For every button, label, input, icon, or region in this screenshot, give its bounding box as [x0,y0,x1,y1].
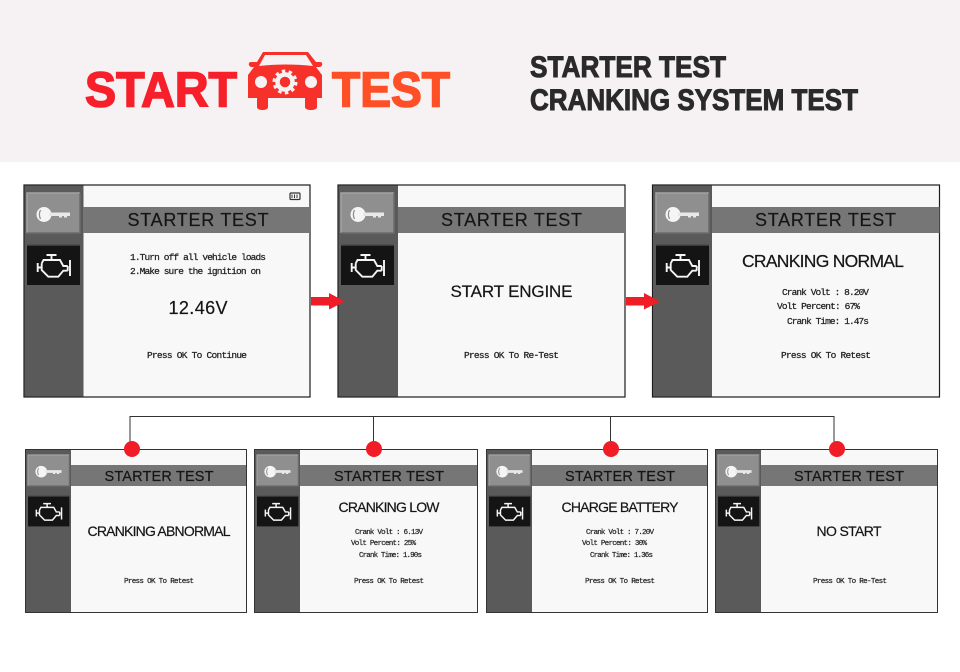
logo word START: START [85,64,237,118]
status: START ENGINE [450,282,572,301]
readings: Crank Volt : 8.20V [782,287,869,298]
panel: cranking low screen [254,450,478,612]
screen title: STARTER TEST [104,469,214,485]
panel: charge battery screen [486,450,708,612]
screen title: STARTER TEST [794,469,904,485]
heading: starter test: STARTER TEST [530,51,726,84]
panel: starter test voltage screen [24,185,310,397]
screen title: STARTER TEST [441,210,582,230]
prompt: Press OK To Continue [147,350,247,361]
screen title: STARTER TEST [128,210,268,230]
readings: Volt Percent: 67% [777,301,860,312]
status: NO START [816,523,882,539]
readings: Volt Percent: 30% [582,540,647,548]
readings: Crank Volt : 6.13V [355,529,423,537]
readings: Volt Percent: 25% [351,540,416,548]
header background [0,0,960,162]
instructions: 2.Make sure the ignition on [130,266,261,277]
screen title: STARTER TEST [565,469,675,485]
readings: Crank Time: 1.90s [359,552,422,560]
logo word TEST: TEST [332,64,450,118]
voltage reading: 12.46V [168,298,228,318]
panel: no start screen [716,450,938,612]
prompt: Press OK To Re-Test [813,578,887,586]
icon: battery [290,193,300,200]
prompt: Press OK To Retest [124,578,194,586]
prompt: Press OK To Retest [585,578,655,586]
readings: Crank Time: 1.47s [787,316,869,327]
status: CRANKING LOW [338,499,440,515]
arrow [311,293,345,310]
prompt: Press OK To Retest [781,350,871,361]
screen title: STARTER TEST [755,210,896,230]
connector dots [124,441,845,457]
prompt: Press OK To Re-Test [464,350,559,361]
panel: cranking abnormal screen [26,450,246,612]
readings [582,529,654,560]
connector lines [130,416,834,449]
arrow [626,293,660,310]
instructions: 1.Turn off all vehicle loads [130,252,266,263]
instructions [130,252,266,277]
readings: Crank Volt : 7.20V [586,529,654,537]
panel: start engine screen [338,185,625,397]
panel: cranking normal screen [652,185,940,397]
screen title: STARTER TEST [334,469,444,485]
logo: START car TEST [85,52,450,118]
readings [351,529,423,560]
heading: cranking system test: CRANKING SYSTEM TEST [530,84,858,117]
prompt: Press OK To Retest [354,578,424,586]
readings: Crank Time: 1.36s [590,552,653,560]
icon: car with gear [248,52,322,110]
readings [777,287,869,327]
status: CRANKING ABNORMAL [88,523,231,539]
status: CRANKING NORMAL [742,251,904,271]
status: CHARGE BATTERY [562,499,679,515]
